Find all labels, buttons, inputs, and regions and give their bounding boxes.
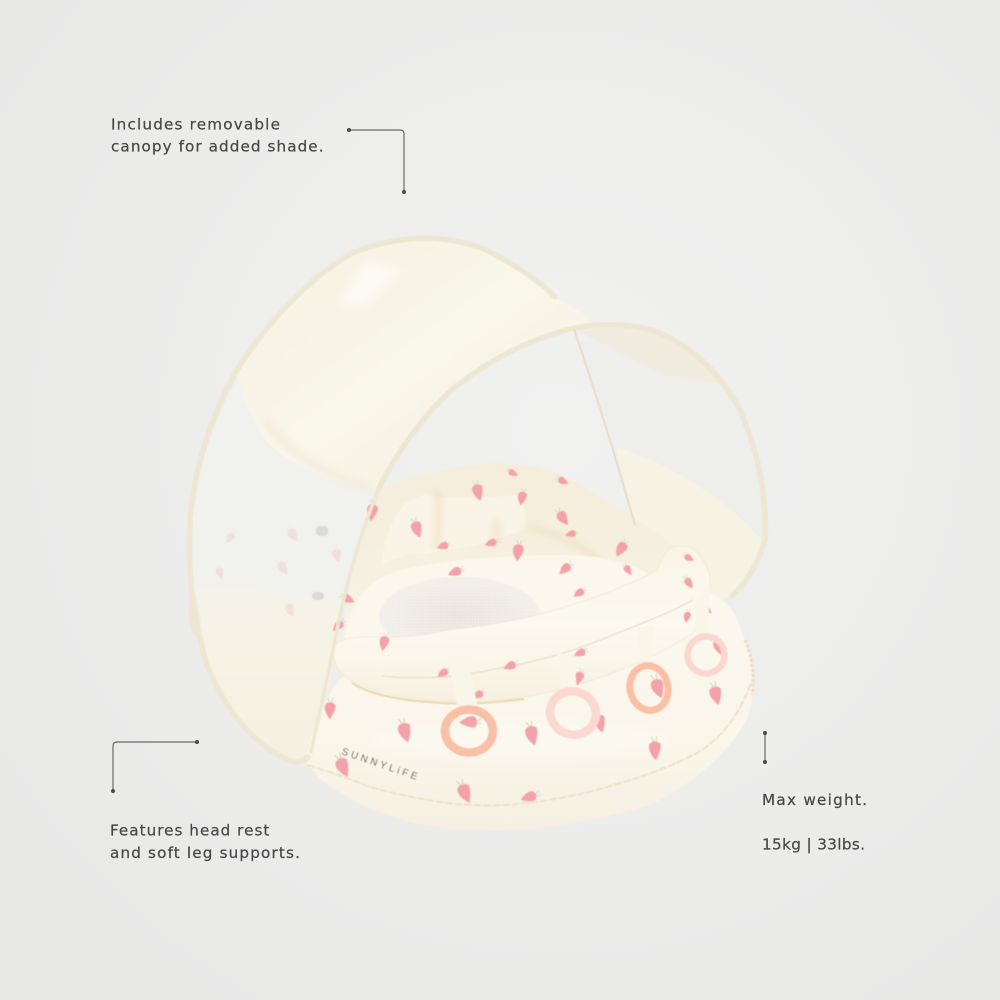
callout line: canopy (347, 128, 406, 194)
brand logo: SUNNYLiFE (340, 746, 422, 784)
canopy hoop front and right (378, 325, 765, 596)
strap 3 (638, 625, 653, 672)
lower float body (306, 590, 753, 830)
carrots on lower float (324, 635, 726, 806)
strap 1 (448, 655, 478, 712)
shade highlight (340, 262, 400, 305)
strap 2 (557, 653, 577, 692)
canopy shade fabric (237, 238, 591, 490)
callout: max weight text: 15kg | 33lbs. (762, 836, 865, 854)
float highlight (370, 720, 670, 760)
callout line: max weight (763, 731, 767, 764)
inner ring surface (345, 555, 650, 670)
callout: max weight text: Max weight. (762, 791, 868, 809)
carrots on tube (377, 552, 713, 679)
mesh seat (379, 577, 541, 655)
right mesh cream fold (616, 447, 765, 600)
headrest panel (382, 495, 525, 563)
ring 1 (445, 710, 493, 752)
callout: canopy text: Includes removable (111, 116, 281, 134)
left scalloped float edge behind canopy (188, 600, 200, 640)
ring 4 (688, 636, 724, 674)
faint carrots behind mesh (215, 524, 343, 619)
inner crease shadow (436, 490, 600, 560)
canopy hoop front lower (311, 490, 378, 752)
ring 2 (544, 685, 602, 741)
tube ring (333, 546, 710, 701)
carrots inside seat (330, 467, 634, 634)
tube underside shadow (352, 683, 524, 703)
ring 3 (626, 662, 672, 714)
mesh edge seam (574, 329, 635, 525)
left mesh panel (190, 375, 375, 757)
right scalloped edge (745, 640, 753, 695)
tube seam (382, 600, 693, 678)
callout: canopy text: canopy for added shade. (111, 138, 325, 156)
scalloped seam (308, 680, 752, 806)
strap 4 (695, 585, 710, 642)
callout line: head rest (111, 740, 199, 793)
illustration: baby float with canopy (188, 238, 765, 830)
right mesh panel (574, 329, 765, 598)
left mesh lower cream (196, 572, 345, 760)
callout: head rest text: and soft leg supports. (110, 844, 301, 862)
right mesh upper fold (580, 327, 728, 385)
shade fold shadow (265, 420, 370, 486)
seat interior (340, 463, 700, 680)
callout: head rest text: Features head rest (110, 822, 270, 840)
canopy hoop rear and left (189, 238, 555, 762)
